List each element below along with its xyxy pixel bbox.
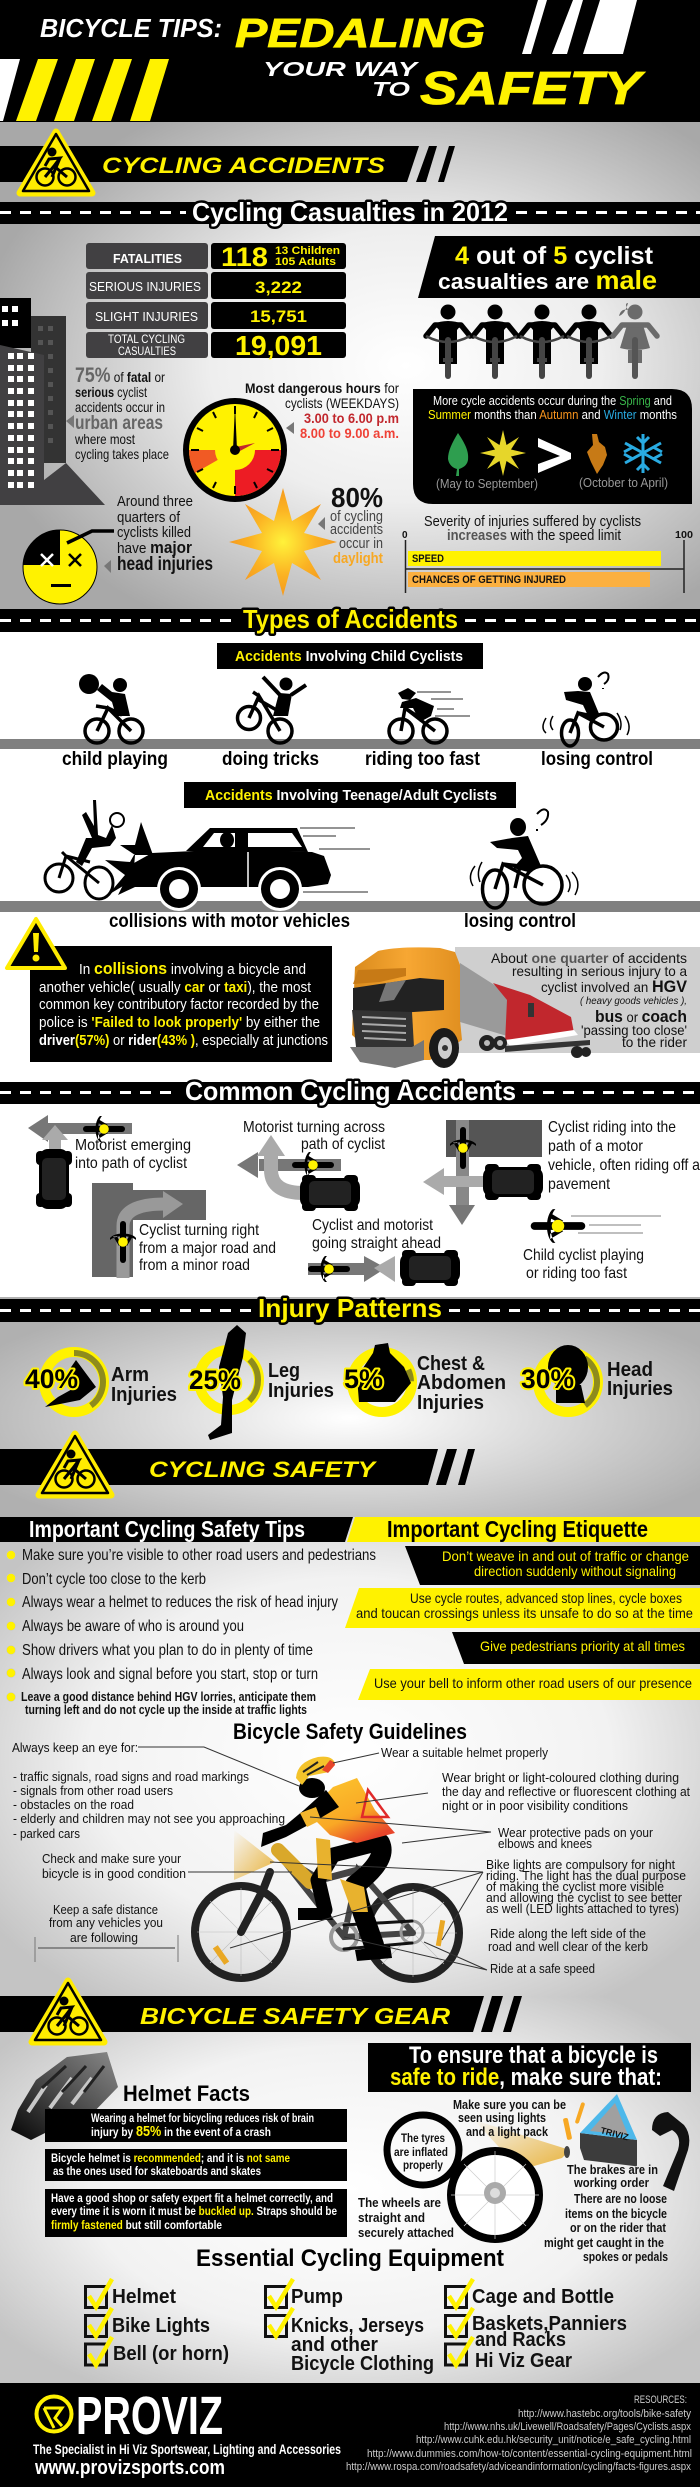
injury: head: Head xyxy=(607,1359,653,1381)
text: head injuries: quarters of xyxy=(117,509,181,526)
text: wheels: The wheels are xyxy=(358,2195,441,2210)
panel: seasons xyxy=(413,389,692,504)
text: brakes: working order xyxy=(573,2175,649,2190)
rider legs xyxy=(318,1843,382,1945)
text: head injuries: have major xyxy=(117,538,192,557)
injury: arm: Arm xyxy=(111,1364,149,1386)
text: lights: seen using lights xyxy=(458,2111,546,2125)
text: 80 percent daylight xyxy=(318,482,383,567)
diagram: motorist emerging: into path of cyclist xyxy=(75,1155,187,1172)
figure: adult losing control xyxy=(470,809,578,908)
diagram: cyclist turning right xyxy=(92,1183,276,1278)
text: wheels: straight and xyxy=(358,2210,425,2225)
diagram: child cyclist: or riding too fast xyxy=(526,1265,627,1282)
caption: Motorist emerging xyxy=(75,1137,191,1154)
list: safety tips: Show drivers what you plan to do in plenty of time xyxy=(22,1642,313,1659)
panel: helmet fact 1: Wearing a helmet for bicycling reduces risk of brain xyxy=(91,2111,314,2125)
row: total casualties xyxy=(108,330,322,361)
row: fatalities: 105 Adults xyxy=(275,256,336,268)
road heading: cycling casualties in 2012: Cycling Casualties in 2012 xyxy=(192,197,508,227)
text: protective pads: elbows and knees xyxy=(498,1836,592,1851)
row: serious injuries: 3,222 xyxy=(255,278,302,297)
tagline: The Specialist in Hi Viz Sportswear, Lighting and Accessories xyxy=(33,2441,341,2457)
bar: speed: SPEED xyxy=(412,553,444,565)
icon: snowflake xyxy=(624,434,662,473)
icon: clock dangerous hours xyxy=(183,398,287,502)
text: good condition: Check and make sure your xyxy=(42,1851,182,1866)
icon: five cyclists from front xyxy=(426,303,657,379)
injury: arm xyxy=(25,1352,177,1412)
diagram: cyclist riding into path: pavement xyxy=(548,1176,610,1193)
annotations: leader lines xyxy=(138,1747,491,1970)
text: most dangerous hours: cyclists (WEEKDAYS) xyxy=(285,395,399,411)
bar: chances of injury xyxy=(408,572,650,587)
row: slight injuries xyxy=(95,307,307,326)
text: wheels: securely attached xyxy=(358,2225,454,2240)
checklist: equipment: and other xyxy=(291,2334,378,2356)
injury: chest and abdomen: Injuries xyxy=(417,1392,484,1414)
check boxes xyxy=(86,2286,466,2365)
white road stripes top right xyxy=(0,0,637,121)
heading: child cyclists xyxy=(217,643,483,669)
text: 80 percent daylight: daylight xyxy=(333,550,383,567)
heading: etiquette: Important Cycling Etiquette xyxy=(387,1516,648,1542)
row: fatalities: FATALITIES xyxy=(113,251,182,266)
illustration: cyclist with safety gear xyxy=(195,1757,459,1979)
row: total casualties: 19,091 xyxy=(235,330,322,361)
diagram: cyclist riding into path: path of a motor xyxy=(548,1138,644,1155)
bar: chances of injury: CHANCES OF GETTING INJURED xyxy=(412,574,566,586)
heading: teenage and adult cyclists: Accidents Involving Teenage/Adult Cyclists xyxy=(205,787,497,804)
callout: 4 out of 5 male xyxy=(418,236,700,298)
text: hgv fact: 'passing too close' xyxy=(581,1022,687,1038)
title line: your way: YOUR WAY xyxy=(263,59,419,81)
text: helmet: Wear a suitable helmet properly xyxy=(381,1745,548,1760)
panel: collisions explanation: In collisions involving a bicycle and xyxy=(79,959,306,978)
icon: light pack xyxy=(563,2094,637,2166)
icon: warning triangle xyxy=(7,919,65,968)
road heading: types of accidents: Types of Accidents xyxy=(243,604,458,634)
label: doing tricks: doing tricks xyxy=(222,749,319,770)
road heading: injury patterns xyxy=(0,1293,700,1323)
resources xyxy=(346,2394,692,2473)
banner heading: BICYCLE SAFETY GEAR xyxy=(140,2003,450,2029)
list: safety tips: turning left and do not cycle up the inside at traffic lights xyxy=(25,1703,307,1717)
text: 80 percent daylight: of cycling xyxy=(330,508,383,525)
text: head injuries: Around three xyxy=(117,493,193,510)
title word: safety: SAFETY xyxy=(420,62,646,114)
text: hgv fact xyxy=(491,950,688,1050)
rider head and helmet xyxy=(299,1778,325,1798)
etiquette: bell xyxy=(358,1669,700,1700)
label: child playing: child playing xyxy=(62,749,168,770)
injury: head: Injuries xyxy=(607,1378,673,1400)
etiquette: pedestrians: Give pedestrians priority at all times xyxy=(480,1638,685,1654)
caption: Cyclist and motorist xyxy=(312,1217,433,1234)
panel: safe to ride: safe to ride, make sure that: xyxy=(390,2064,662,2091)
injury: leg: Leg xyxy=(268,1360,300,1382)
panel: seasons: (October to April) xyxy=(579,475,668,490)
text: protective pads xyxy=(498,1825,654,1851)
text: brakes: The brakes are in xyxy=(567,2162,658,2177)
etiquette: weave xyxy=(405,1546,700,1585)
checklist: equipment: Bike Lights xyxy=(112,2315,210,2337)
text: 80 percent daylight: accidents xyxy=(330,521,383,538)
text: safe distance with bracket: Keep a safe distance xyxy=(53,1902,158,1917)
etiquette: weave: Don’t weave in and out of traffic or change xyxy=(442,1548,689,1564)
checklist: equipment: Baskets,Panniers xyxy=(472,2313,627,2335)
road strip: child accidents xyxy=(0,739,700,749)
text: 80 percent daylight: 80% xyxy=(331,482,383,513)
title word: pedaling: PEDALING xyxy=(235,10,485,56)
icon: brake lever xyxy=(652,2112,689,2191)
icon: tyre with text: are inflated xyxy=(394,2145,448,2159)
light pack beam xyxy=(474,2120,570,2170)
text: 75 percent urban: where most xyxy=(74,431,135,447)
list: safety tips: Make sure you’re visible to other road users and pedestrians xyxy=(22,1547,376,1564)
caption: Cyclist turning right xyxy=(139,1222,259,1239)
text: hgv fact: to the rider xyxy=(622,1034,687,1050)
text: 75 percent urban: serious cyclist xyxy=(75,384,147,400)
icon: wheel xyxy=(448,2148,542,2242)
panel: collisions explanation: common key contributory factor recorded by the xyxy=(39,997,319,1013)
seasons text: More cycle accidents occur during the Spring and xyxy=(433,393,672,408)
panel: helmet fact 3: every time it is worn it must be buckled up. Straps should be xyxy=(51,2204,337,2218)
text: keep an eye: - traffic signals, road signs and road markings xyxy=(13,1769,249,1784)
text: head injuries xyxy=(104,493,213,575)
panel: collisions explanation: another vehicle( usually car or taxi), the most xyxy=(39,980,311,996)
text: no loose items: or on the rider that xyxy=(570,2220,667,2235)
label: losing control: losing control xyxy=(541,749,653,770)
list: safety tips xyxy=(6,1547,376,1717)
text: ride along left: Ride along the left side of the xyxy=(490,1926,646,1941)
chart: severity vs speed: 0 xyxy=(402,530,408,541)
list: safety tips: Don’t cycle too close to the kerb xyxy=(22,1571,206,1588)
text: lights: Make sure you can be xyxy=(453,2098,566,2112)
text: keep an eye: - elderly and children may not see you approaching xyxy=(13,1811,285,1826)
text: keep an eye: - obstacles on the road xyxy=(13,1797,134,1812)
text: safe distance with bracket: are following xyxy=(70,1930,138,1945)
list: safety tips: Leave a good distance behind HGV lorries, anticipate them xyxy=(21,1690,316,1704)
text: hgv fact: ( heavy goods vehicles ), xyxy=(580,995,687,1007)
icon: spring leaf xyxy=(448,433,468,476)
text: 75 percent urban: urban areas xyxy=(75,413,163,434)
panel: safe to ride xyxy=(368,2042,691,2092)
website: www.provizsports.com xyxy=(34,2457,225,2479)
diagram: cyclist turning right: from a major road and xyxy=(139,1240,276,1257)
text: bike lights: as well (LED lights attached to tyres) xyxy=(486,1901,679,1916)
text: bright clothing: Wear bright or light-coloured clothing during xyxy=(442,1770,679,1785)
etiquette: routes xyxy=(345,1588,700,1628)
text: safe speed: Ride at a safe speed xyxy=(490,1961,595,1976)
panel: helmet fact 2 xyxy=(45,2149,347,2181)
section banner: bicycle safety gear xyxy=(0,1981,522,2042)
label: collisions with motor vehicles: collisions with motor vehicles xyxy=(109,911,350,932)
row: total casualties: CASUALTIES xyxy=(118,346,176,358)
caption: Motorist turning across xyxy=(243,1119,385,1136)
checklist: equipment: Bicycle Clothing xyxy=(291,2353,434,2375)
text: brakes xyxy=(567,2162,658,2190)
bike frame xyxy=(241,1850,423,1950)
text: bike lights: of making the cyclist more visible xyxy=(486,1879,664,1894)
icon: cyclist warning sign xyxy=(39,1434,111,1495)
road heading: common cycling accidents xyxy=(0,1076,700,1106)
figure: collision with car xyxy=(45,800,370,911)
text: keep an eye: - signals from other road users xyxy=(13,1783,173,1798)
diagram: motorist turning across xyxy=(237,1119,385,1211)
text: hgv fact: cyclist involved an HGV xyxy=(541,977,688,996)
heading: helmet facts: Helmet Facts xyxy=(123,2081,250,2106)
casualties table xyxy=(86,242,346,361)
heading: bicycle safety guidelines: Bicycle Safety Guidelines xyxy=(233,1719,467,1744)
panel: helmet fact 3: Have a good shop or safety expert fit a helmet correctly, and xyxy=(51,2191,333,2205)
etiquette: weave: direction suddenly without signaling xyxy=(474,1563,676,1579)
etiquette: pedestrians xyxy=(452,1632,700,1664)
text: most dangerous hours xyxy=(245,380,399,441)
diagram: cyclist turning right: from a minor road xyxy=(139,1257,250,1274)
injury: leg: Injuries xyxy=(268,1380,334,1402)
list: safety tips: Always wear a helmet to reduces the risk of head injury xyxy=(22,1594,338,1611)
row: fatalities: 13 Children xyxy=(275,245,340,257)
wheels xyxy=(195,1886,459,1979)
panel: helmet fact 2: as the ones used for skateboards and skates xyxy=(53,2164,261,2178)
road strip: adult accidents xyxy=(0,901,700,912)
icon: truck xyxy=(350,947,591,1068)
text: most dangerous hours: 8.00 to 9.00 a.m. xyxy=(300,425,399,441)
icon: tyre with text: The tyres xyxy=(401,2131,445,2145)
text: no loose items: There are no loose xyxy=(574,2191,667,2206)
list: safety tips: Always be aware of who is around you xyxy=(22,1618,244,1635)
banner heading: CYCLING ACCIDENTS xyxy=(102,153,385,178)
yellow ticks xyxy=(89,2279,473,2365)
text: most dangerous hours: Most dangerous hours for xyxy=(245,380,399,396)
injury: chest and abdomen: Chest & xyxy=(417,1353,485,1375)
checklist: equipment: Cage and Bottle xyxy=(472,2286,614,2308)
chart: severity vs speed xyxy=(402,513,693,593)
icon: tyre with text xyxy=(387,2115,459,2185)
logo: proviz mark xyxy=(36,2396,72,2432)
callout: 4 out of 5 male: casualties are male xyxy=(438,265,657,295)
text: 75 percent urban: cycling takes place xyxy=(75,446,169,462)
text: bright clothing xyxy=(442,1770,690,1813)
label: riding too fast: riding too fast xyxy=(365,749,481,770)
icon: summer sun xyxy=(480,430,526,476)
icon: sun daylight xyxy=(229,488,337,596)
diagram: straight ahead: going straight ahead xyxy=(312,1235,441,1252)
injury: chest and abdomen: 5% xyxy=(344,1364,383,1394)
text: 75 percent urban xyxy=(66,364,169,462)
rider arm xyxy=(261,1790,339,1847)
yellow road stripes left xyxy=(16,59,169,121)
figure: doing tricks xyxy=(238,677,306,743)
item labels: Helmet xyxy=(112,2286,176,2308)
injury: arm: 40% xyxy=(25,1364,78,1394)
diagram: straight ahead xyxy=(308,1217,460,1286)
text: bright clothing: night or in poor visibility conditions xyxy=(442,1798,628,1813)
row: serious injuries: SERIOUS INJURIES xyxy=(89,279,201,294)
panel: hgv fact background xyxy=(455,947,700,1053)
row: serious injuries xyxy=(89,278,302,297)
row: slight injuries: 15,751 xyxy=(250,307,307,326)
icon: autumn leaf xyxy=(587,434,607,474)
text: 75 percent urban: 75% of fatal or xyxy=(75,364,165,387)
section banner: cycling accidents xyxy=(0,132,455,193)
title line: to: TO xyxy=(372,79,411,101)
road heading: injury patterns: Injury Patterns xyxy=(258,1293,442,1323)
checklist: equipment: Knicks, Jerseys xyxy=(291,2315,424,2337)
season labels: (May to September) xyxy=(436,476,538,491)
heading: safety tips: Important Cycling Safety Tips xyxy=(29,1516,305,1542)
text: keep an eye xyxy=(12,1740,285,1841)
road heading: common cycling accidents: Common Cycling Accidents xyxy=(185,1076,516,1106)
icon: city buildings xyxy=(0,298,105,505)
text: hgv fact: resulting in serious injury to a xyxy=(512,963,687,979)
text: wheels xyxy=(358,2195,454,2240)
text: lights: and a light pack xyxy=(466,2125,548,2139)
banner heading: CYCLING SAFETY xyxy=(149,1457,378,1482)
panel: collisions explanation xyxy=(30,946,332,1062)
row: fatalities xyxy=(113,242,340,272)
panel: helmet fact 3 xyxy=(45,2189,347,2237)
checklist: equipment: Hi Viz Gear xyxy=(475,2350,572,2372)
road heading: types of accidents xyxy=(0,604,700,634)
panel: collisions explanation: police is 'Failed to look properly' by either the xyxy=(39,1015,320,1031)
text: bike lights: and allowing the cyclist to see better xyxy=(486,1890,683,1905)
injury: head: 30% xyxy=(521,1364,574,1394)
title line: bicycle tips: BICYCLE TIPS: xyxy=(40,13,222,43)
diagram: child cyclist xyxy=(523,1209,661,1282)
chart: severity vs speed: 100 xyxy=(675,530,693,541)
icon: cyclist warning sign xyxy=(20,132,92,193)
caption: Cyclist riding into the xyxy=(548,1119,676,1136)
section banner: cycling safety xyxy=(0,1434,475,1495)
injury: leg xyxy=(188,1325,334,1440)
panel: helmet fact 1: injury by 85% in the event of a crash xyxy=(91,2123,271,2140)
text: hgv fact: About one quarter of accidents xyxy=(491,950,687,966)
text: safe distance with bracket xyxy=(35,1902,178,1962)
icon: head with injury xyxy=(23,530,114,604)
figure: riding too fast xyxy=(389,688,470,743)
callout: 4 out of 5 male: 4 out of 5 cyclist xyxy=(455,242,654,270)
injury: leg: 25% xyxy=(189,1365,241,1395)
icon: helmet xyxy=(11,2052,118,2140)
chart: severity vs speed: increases with the speed limit xyxy=(447,527,622,544)
text: bike lights xyxy=(486,1857,686,1916)
text: 75 percent urban: accidents occur in xyxy=(75,399,165,415)
injury: arm: Injuries xyxy=(111,1384,177,1406)
diagram: motorist turning across: path of cyclist xyxy=(301,1136,385,1153)
text: no loose items: might get caught in the xyxy=(544,2235,664,2250)
text: protective pads: Wear protective pads on your xyxy=(498,1825,654,1840)
text: no loose items xyxy=(544,2191,668,2264)
icon: cyclist warning sign xyxy=(32,1981,104,2042)
checklist: equipment: Pump xyxy=(291,2286,343,2308)
row: slight injuries: SLIGHT INJURIES xyxy=(95,309,198,324)
text: ride along left: road and well clear of the kerb xyxy=(488,1939,648,1954)
row: fatalities: 118 xyxy=(221,242,268,272)
diagram: motorist emerging xyxy=(28,1115,191,1209)
text: lights xyxy=(453,2098,566,2139)
caption: Child cyclist playing xyxy=(523,1247,644,1264)
rider vest xyxy=(308,1778,395,1843)
injury: chest and abdomen: Abdomen xyxy=(417,1372,506,1394)
injury: head xyxy=(521,1342,673,1422)
panel: seasons: Summer months than Autumn and Winter months xyxy=(428,407,677,422)
icon: tyre with text: properly xyxy=(403,2158,443,2172)
road heading: cycling casualties in 2012 xyxy=(0,197,700,227)
text: good condition: bicycle is in good condition xyxy=(42,1866,186,1881)
text: most dangerous hours: 3.00 to 6.00 p.m xyxy=(304,410,399,426)
text: head injuries: cyclists killed xyxy=(117,524,191,541)
text: no loose items: spokes or pedals xyxy=(583,2249,668,2264)
text: keep an eye: - parked cars xyxy=(13,1826,80,1841)
header banner xyxy=(0,0,700,122)
figure: losing control xyxy=(543,673,629,746)
footer xyxy=(0,2383,700,2487)
icon: light pack: TRIVIZ xyxy=(599,2125,630,2142)
greater-than sign xyxy=(538,438,571,473)
heading: child cyclists: Accidents Involving Child Cyclists xyxy=(235,648,463,665)
text: head injuries: head injuries xyxy=(117,554,213,575)
diagram: cyclist riding into path xyxy=(423,1119,700,1225)
list: safety tips: Always look and signal before you start, stop or turn xyxy=(22,1666,318,1683)
text: good condition xyxy=(42,1851,186,1881)
light beam xyxy=(234,1830,275,1880)
row: total casualties: TOTAL CYCLING xyxy=(108,334,185,346)
checklist: equipment: Bell (or horn) xyxy=(113,2343,229,2365)
checklist: equipment: and Racks xyxy=(475,2329,566,2351)
text: no loose items: items on the bicycle xyxy=(565,2206,667,2221)
heading: teenage and adult cyclists xyxy=(184,782,516,808)
text: safe distance with bracket: from any vehicles you xyxy=(49,1915,163,1930)
panel: helmet fact 1 xyxy=(45,2109,347,2142)
figure: child playing xyxy=(79,674,143,743)
chart: severity vs speed: Severity of injuries suffered by cyclists xyxy=(424,513,641,530)
text: bike lights: riding. The light has the dual purpose xyxy=(486,1868,686,1883)
text: 80 percent daylight: occur in xyxy=(339,535,383,552)
text: bike lights: Bike lights are compulsory for night xyxy=(486,1857,675,1872)
heading: essential cycling equipment: Essential Cycling Equipment xyxy=(196,2245,504,2272)
checklist: equipment xyxy=(86,2279,627,2375)
panel: helmet fact 3: firmly fastened but still comfortable xyxy=(51,2218,222,2232)
label: adult losing control: losing control xyxy=(464,911,576,932)
text: ride along left xyxy=(488,1926,648,1954)
panel: collisions explanation: driver(57%) or rider(43% ), especially at junctions xyxy=(39,1033,328,1049)
bar: speed xyxy=(408,551,661,566)
injury: chest and abdomen xyxy=(343,1343,506,1421)
logo: wordmark: PROVIZ xyxy=(76,2386,223,2446)
panel: safe to ride: To ensure that a bicycle is xyxy=(409,2042,658,2069)
panel: helmet fact 2: Bicycle helmet is recommended; and it is not same xyxy=(51,2151,290,2165)
text: keep an eye: Always keep an eye for: xyxy=(12,1740,138,1755)
text: hgv fact: bus or coach xyxy=(595,1007,687,1026)
